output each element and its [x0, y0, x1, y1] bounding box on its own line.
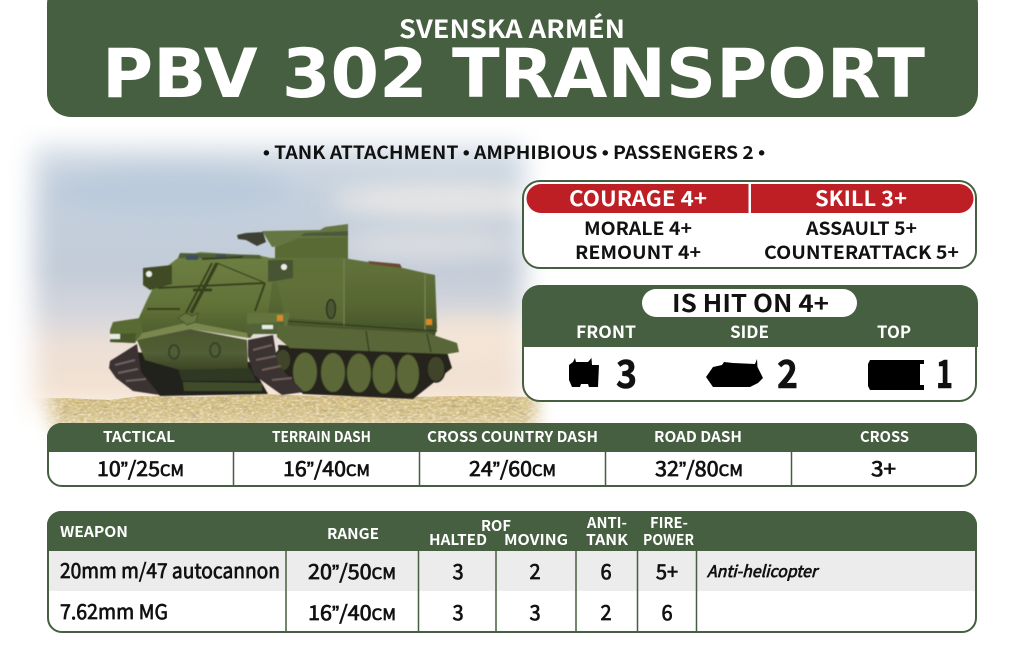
movement headings: CROSS — [860, 426, 909, 447]
assault and counterattack ratings — [764, 215, 959, 265]
morale and remount ratings — [575, 215, 701, 265]
right track guard — [247, 313, 290, 334]
movement values: 32”/80CM — [655, 453, 743, 482]
row: 7.62mm MG: 7.62mm MG — [60, 596, 168, 625]
side armour value: 2 — [777, 344, 798, 400]
panel: weapons table — [47, 511, 977, 632]
movement headings: TACTICAL — [103, 426, 175, 447]
movement headings: ROAD DASH — [654, 426, 742, 447]
left track guard — [110, 318, 143, 343]
side fender — [277, 325, 459, 354]
turret top plate — [262, 224, 348, 247]
weapon note: Anti-helicopter — [707, 558, 820, 582]
weapon table headings: MOVING — [504, 529, 568, 550]
right front track — [248, 335, 304, 395]
movement headings: TERRAIN DASH — [272, 426, 371, 447]
icon: top silhouette — [868, 360, 924, 390]
weapon table headings: ROF — [481, 515, 511, 536]
row: 7.62mm MG: 2 — [600, 597, 612, 626]
movement headings: CROSS COUNTRY DASH — [427, 426, 598, 447]
photo: vehicle on grass — [20, 136, 550, 436]
row: 20mm autocannon: 20mm m/47 autocannon — [60, 555, 280, 584]
side seams and hatch — [344, 259, 425, 331]
column dividers — [286, 551, 696, 631]
idler and sprocket — [275, 349, 445, 382]
grass strip — [39, 394, 549, 436]
row: 7.62mm MG: 16”/40CM — [308, 597, 396, 626]
armour facing labels: TOP — [877, 318, 911, 343]
armour facing labels: FRONT — [576, 318, 636, 343]
movement values — [97, 453, 896, 482]
morale and remount ratings: REMOUNT 4+ — [575, 239, 701, 265]
autocannon barrel — [237, 232, 266, 246]
assault and counterattack ratings: COUNTERATTACK 5+ — [764, 239, 959, 265]
icon: side silhouette — [706, 359, 763, 387]
weapon table headings: HALTED — [429, 529, 487, 550]
assault and counterattack ratings: ASSAULT 5+ — [805, 215, 917, 241]
morale and remount ratings: MORALE 4+ — [584, 215, 692, 241]
tow rings — [169, 343, 220, 359]
lower front hull — [137, 329, 248, 370]
column dividers — [234, 452, 792, 485]
rear plate edge — [270, 320, 437, 331]
is hit on pill: IS HIT ON 4+ — [672, 284, 829, 319]
row: 20mm autocannon — [60, 555, 820, 585]
movement values: 24”/60CM — [469, 453, 556, 482]
panel: courage and skill — [523, 181, 976, 268]
row: 20mm autocannon: 6 — [600, 556, 612, 585]
weapon table headings: POWER — [643, 529, 694, 550]
armour facing labels: SIDE — [730, 318, 769, 343]
faction name: SVENSKA ARMÉN — [399, 10, 625, 46]
sky background — [20, 136, 538, 416]
courage header — [526, 183, 748, 213]
weapon table headings: FIRE- — [650, 512, 688, 533]
weapon table headings: TANK — [586, 529, 629, 550]
skill header: SKILL 3+ — [815, 183, 907, 213]
weapon table headings: WEAPON — [60, 521, 128, 542]
belly plate — [183, 382, 262, 391]
front armour value: 3 — [616, 344, 637, 400]
movement values: 3+ — [871, 453, 896, 482]
courage header: COURAGE 4+ — [569, 183, 707, 213]
glacis lower bump — [138, 322, 248, 340]
weapon table headings — [60, 512, 694, 550]
row: 7.62mm MG: 6 — [661, 597, 673, 626]
is hit on pill — [642, 284, 857, 319]
unit title: PBV 302 TRANSPORT — [102, 35, 926, 114]
row: 20mm autocannon: 3 — [452, 556, 464, 585]
panel: movement table — [47, 423, 977, 486]
glacis plate — [137, 252, 275, 338]
special rules tagline: • TANK ATTACHMENT • AMPHIBIOUS • PASSENGERS 2 • — [263, 139, 765, 165]
glacis ridges — [147, 257, 265, 313]
shaded row — [49, 551, 975, 591]
row: 7.62mm MG: 3 — [529, 597, 541, 626]
header banner — [47, 0, 978, 117]
left track — [109, 344, 160, 395]
movement values: 10”/25CM — [97, 453, 184, 482]
weapon table headings: RANGE — [327, 523, 379, 544]
hull side — [262, 258, 437, 336]
row: 7.62mm MG — [60, 596, 673, 626]
under-hull shadow and rear track — [278, 345, 452, 399]
skill header — [751, 183, 974, 213]
row: 20mm autocannon: 20”/50CM — [308, 556, 396, 585]
road wheels — [292, 352, 420, 394]
movement headings — [103, 426, 909, 447]
weapon table headings: ANTI- — [586, 512, 627, 533]
panel: armour — [522, 284, 978, 401]
row: 7.62mm MG: 3 — [452, 597, 464, 626]
movement values: 16”/40CM — [283, 453, 370, 482]
icon: front silhouette — [569, 358, 599, 387]
top armour value: 1 — [936, 344, 953, 400]
row: 20mm autocannon: 5+ — [656, 556, 678, 585]
periscope housings — [143, 260, 293, 290]
tank miniature — [109, 224, 459, 399]
armour facing labels — [576, 318, 911, 343]
row: 20mm autocannon: 2 — [529, 556, 541, 585]
turret base — [275, 236, 348, 259]
